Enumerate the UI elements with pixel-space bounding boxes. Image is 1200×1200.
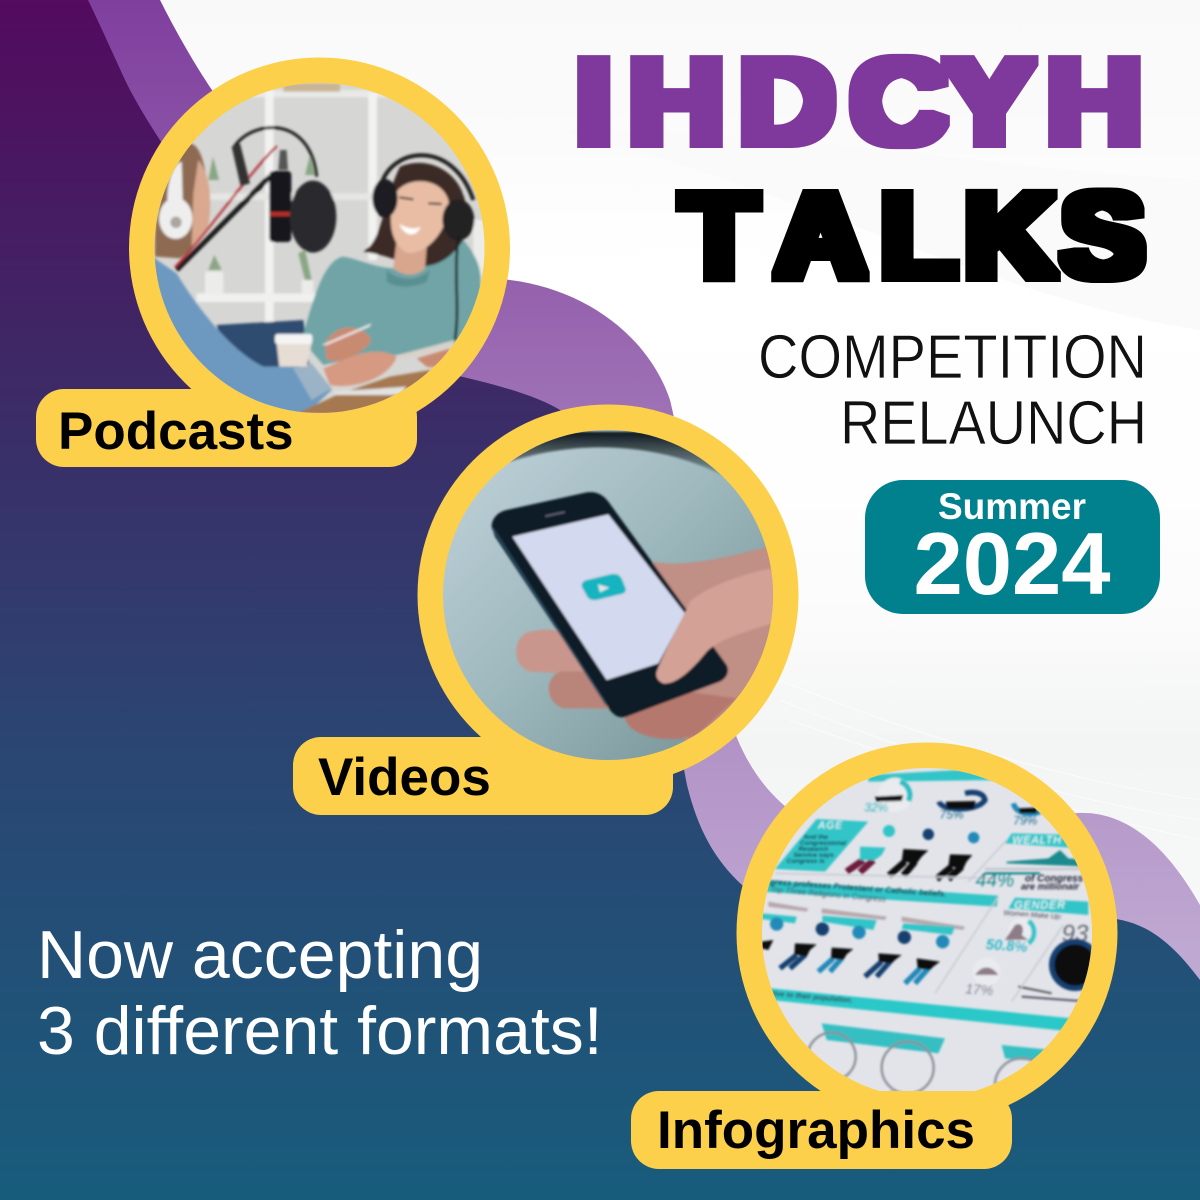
religion figures	[768, 902, 965, 930]
pop filter	[290, 181, 336, 253]
label pill: Infographics: Infographics	[657, 1101, 975, 1160]
religion band	[762, 880, 998, 907]
label pill: Videos	[293, 737, 673, 815]
photo: blurred infographic on a page: And the	[802, 834, 828, 841]
left woman denim shirt	[154, 256, 332, 412]
photo: blurred infographic on a page: are millionair	[1021, 882, 1080, 892]
yellow ring: infographics	[736, 742, 1118, 1124]
photo: blurred infographic on a page: Research	[798, 846, 828, 853]
label pill: Infographics	[631, 1091, 1012, 1169]
photo: blurred infographic on a page: 79%	[1013, 813, 1038, 827]
headphones right	[382, 155, 473, 200]
photo: blurred infographic on a page: gress professes Protestant or Catholic beliefs.	[769, 877, 947, 899]
age figures	[883, 825, 895, 837]
label pill: Podcasts	[36, 389, 417, 467]
photo: blurred infographic on a page: WEALTH	[1012, 835, 1062, 847]
photo: blurred infographic on a page: 44%	[976, 871, 1014, 892]
photo: blurred infographic on a page: Congress is	[787, 858, 825, 865]
photo: blurred infographic on a page: 75%	[940, 807, 964, 821]
age panel	[775, 819, 868, 872]
right woman shirt	[302, 240, 481, 365]
plants	[208, 155, 315, 280]
photo: blurred infographic on a page: Women Make Up:	[1003, 908, 1062, 921]
subtitle: competition relaunch: COMPETITION	[758, 323, 1147, 392]
gender panel	[1008, 898, 1088, 915]
title: TALKS: TALKS	[681, 169, 1145, 303]
cup	[277, 343, 312, 367]
table, paper, hands	[297, 370, 430, 417]
photo: podcast recording	[154, 83, 484, 413]
photo: blurred infographic on a page: AGE	[817, 820, 843, 831]
dividers	[935, 840, 1063, 1002]
title: IHDCYH: IHDCYH	[575, 34, 1143, 169]
photo: blurred infographic on a page: 50.8%	[985, 937, 1028, 956]
badge: Summer 2024	[865, 480, 1160, 614]
sofa	[217, 320, 310, 370]
photo: blurred infographic on a page: Top Three Religions in Congress	[770, 885, 886, 904]
badge: Summer 2024: Summer	[938, 486, 1086, 527]
lower teal band	[771, 986, 1070, 1032]
label text: Podcasts: Podcasts	[58, 402, 294, 461]
top teal ribbon	[868, 768, 1002, 782]
left woman hair and head	[155, 143, 208, 258]
photo: blurred infographic on a page: Congressional	[800, 840, 846, 847]
photo: blurred infographic on a page: 93	[1062, 921, 1089, 948]
call to action text: 3 different formats!	[37, 993, 603, 1069]
thumb	[656, 568, 777, 683]
call to action text	[37, 917, 603, 1069]
fingers	[516, 629, 593, 675]
right woman hair	[362, 160, 467, 268]
photo: blurred infographic on a page: Service says	[793, 852, 834, 859]
yellow ring: podcasts	[129, 58, 510, 438]
yellow ring: videos	[418, 404, 798, 786]
microphone	[269, 171, 291, 242]
label text: Videos: Videos	[318, 748, 491, 807]
photo: blurred infographic on a page: GENDER	[1014, 899, 1066, 911]
photo: blurred infographic on a page: 32%	[864, 801, 889, 815]
photo: phone playing a video	[440, 428, 777, 764]
phone screen	[512, 514, 685, 680]
subtitle: competition relaunch: RELAUNCH	[840, 389, 1147, 458]
photo: blurred infographic on a page: 17%	[965, 980, 994, 998]
lower ribbons and gauges	[822, 1023, 945, 1053]
badge: Summer 2024: 2024	[913, 514, 1111, 613]
play icon	[582, 574, 626, 600]
phone body	[492, 492, 728, 717]
donut stats	[878, 778, 912, 812]
back of hand, right	[653, 545, 777, 742]
wealth panel	[1005, 833, 1088, 848]
photo: blurred infographic on a page	[762, 768, 1092, 1091]
subtitle: competition relaunch	[758, 323, 1147, 458]
photo: blurred infographic on a page: tive to their population.	[771, 989, 853, 1005]
mic boom	[177, 177, 270, 270]
right woman neck and face	[393, 240, 427, 275]
call to action text: Now accepting	[37, 917, 483, 993]
photo: blurred infographic on a page: of Congress	[1025, 874, 1084, 885]
